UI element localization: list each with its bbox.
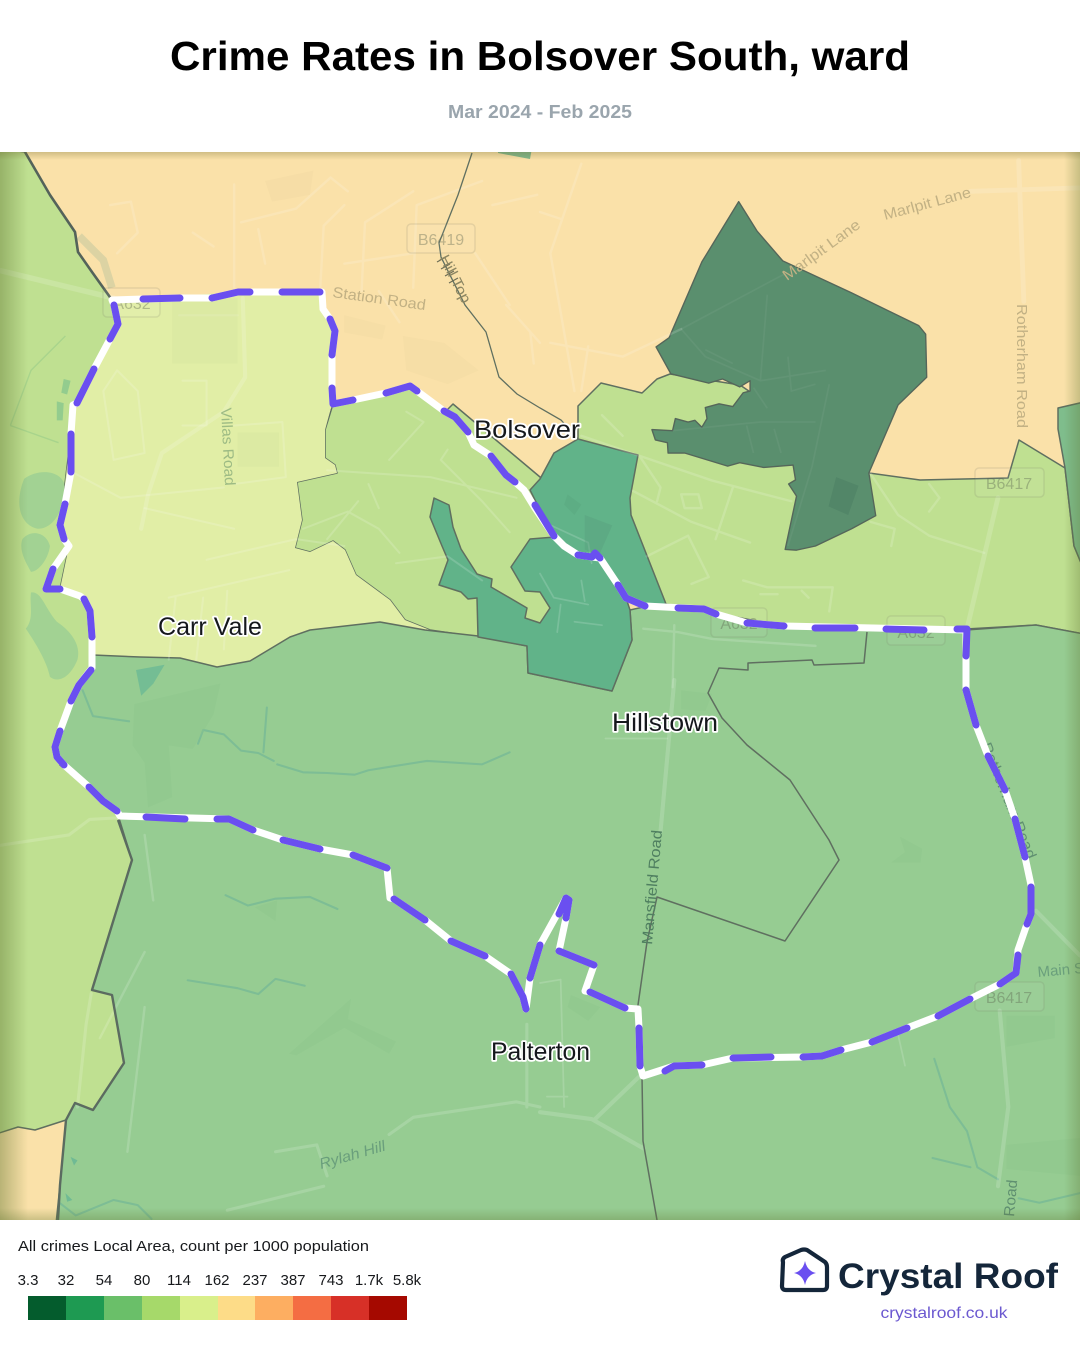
road plate: A632 centre: A632 [720, 616, 758, 633]
title: Crime Rates in Bolsover South, ward [170, 33, 910, 79]
legend tick labels: 743 [318, 1272, 344, 1289]
road plate: A632 east [887, 616, 945, 645]
road label: Marlpit Lane east: Marlpit Lane [882, 184, 973, 224]
legend [18, 1238, 422, 1320]
legend tick labels: 32 [58, 1272, 74, 1289]
legend tick labels: 54 [96, 1272, 112, 1289]
faint roads: central area [303, 412, 517, 580]
road label: Rotherham Road north: Rotherham Road [1013, 304, 1030, 428]
area: west light green [0, 148, 132, 1134]
area: low crime dark green [652, 202, 927, 550]
ward outline purple dashes [46, 292, 1031, 1071]
road label: Hill Top: Hill Top [435, 252, 474, 306]
legend tick labels: 5.8k [393, 1272, 422, 1289]
road label: Rotherham Road south: Rotherham Road [977, 740, 1040, 861]
south-west thick boundary [58, 820, 132, 1220]
road label: Road: Road [1001, 1179, 1021, 1217]
estate roads in dark area [673, 274, 829, 546]
road label: Marlpit Lane west: Marlpit Lane [779, 216, 864, 284]
legend colour scale [28, 1296, 407, 1320]
road label: Station Road: Station Road [331, 284, 427, 314]
small teal patch top of map [498, 152, 532, 159]
legend tick labels: 114 [167, 1272, 191, 1289]
road plate: B6419: B6419 [418, 232, 464, 249]
area: central Bolsover light green [295, 386, 630, 637]
legend tick labels: 387 [280, 1272, 306, 1289]
brand logo [782, 1250, 1058, 1322]
ward outline white casing [46, 292, 1031, 1076]
streams and fields: south-east [540, 680, 1080, 1203]
road plate: B6417 north: B6417 [986, 476, 1032, 493]
place label: Hillstown: Hillstown [612, 709, 718, 737]
legend tick labels [18, 1272, 422, 1289]
subtitle: date range: Mar 2024 - Feb 2025 [448, 102, 632, 122]
place label: Bolsover: Bolsover [474, 416, 580, 444]
faint roads: east residential [540, 160, 1080, 687]
area: Bolsover teal east [530, 439, 666, 606]
western thick boundary [25, 152, 112, 300]
legend tick labels: 3.3 [18, 1272, 38, 1289]
lakes west of ward [19, 472, 78, 679]
road plate: A632 east: A632 [897, 625, 935, 642]
area: Carr Vale pale green [60, 292, 430, 667]
road label: Rylah Hill: Rylah Hill [317, 1138, 388, 1173]
road label: Mansfield Road: Mansfield Road [639, 829, 666, 945]
darker estate patch [829, 477, 859, 515]
faint road network: north [0, 171, 540, 696]
place label: Palterton: Palterton [491, 1038, 590, 1066]
legend tick labels: 237 [242, 1272, 268, 1289]
road plate: B6417 south: B6417 [986, 990, 1032, 1007]
road plate: A632 centre [711, 608, 767, 637]
legend title: All crimes Local Area, count per 1000 population [18, 1238, 369, 1255]
area: east light green [578, 374, 1080, 634]
road label: Villas Road: Villas Road [217, 407, 238, 486]
Hill Top railway ticks [437, 257, 458, 283]
website url: crystalroof.co.uk [880, 1305, 1009, 1322]
place label: Carr Vale: Carr Vale [158, 613, 262, 641]
legend tick labels: 1.7k [355, 1272, 384, 1289]
wordmark: Crystal Roof [838, 1257, 1058, 1296]
road plate: B6417 north [975, 468, 1044, 497]
thin internal boundary: Hillstown area [638, 632, 867, 1220]
streams and fields: south-west [0, 683, 540, 1219]
choropleth map panel [0, 148, 1080, 1224]
area: right edge mid green [1058, 402, 1080, 570]
Hill Top boundary line [439, 153, 578, 439]
road plate: A632 west [103, 288, 160, 317]
legend tick labels: 80 [134, 1272, 150, 1289]
road plate: B6417 south [975, 982, 1044, 1011]
road plate: A632 west: A632 [113, 296, 151, 313]
road plate: B6419 [407, 224, 475, 253]
map edge vignette [0, 152, 1080, 1220]
base area: amber crime band [0, 152, 1080, 1220]
legend tick labels: 162 [204, 1272, 230, 1289]
icon: house with star [782, 1250, 827, 1290]
ward boundary: Bolsover South dashed outline [46, 292, 1031, 1076]
area: Bolsover teal west [430, 498, 632, 691]
faint roads: Carr Vale [141, 298, 245, 529]
area: southern mid green [55, 606, 1080, 1224]
